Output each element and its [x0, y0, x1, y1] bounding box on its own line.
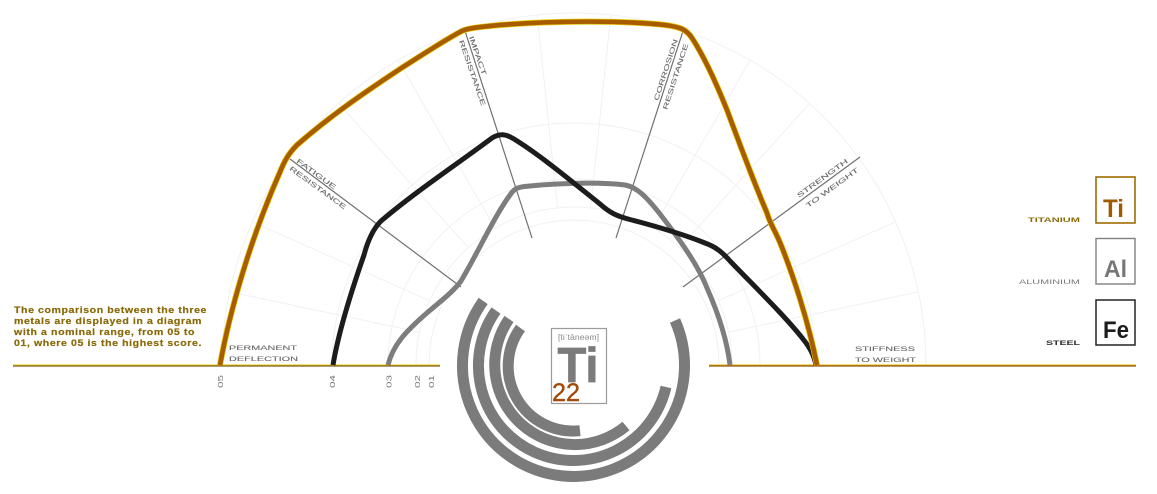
element card: titanium: [tiˈtāneəm]	[558, 333, 599, 342]
scale ticks: 05	[216, 375, 225, 388]
legend: titanium	[1028, 177, 1135, 224]
axis lines	[290, 31, 860, 287]
element card: titanium: Ti	[558, 339, 598, 393]
axis label: impact resistance	[457, 35, 487, 108]
axis label: stiffness to weight: STIFFNESS	[855, 346, 916, 353]
legend: steel: STEEL	[1046, 340, 1080, 347]
element card: titanium: 22	[552, 379, 580, 407]
concentric score rings	[463, 301, 685, 476]
scale ticks: 03	[384, 375, 394, 388]
steel curve	[333, 135, 816, 365]
axis label: fatigue resistance: RESISTANCE	[288, 165, 348, 212]
legend: titanium: TITANIUM	[1028, 217, 1080, 224]
axis label: permanent deflection	[229, 345, 298, 363]
axis label: strength to weight: STRENGTH	[796, 158, 850, 200]
legend: steel: Fe	[1103, 317, 1129, 344]
axis label: permanent deflection: DEFLECTION	[229, 356, 298, 363]
description text: metals are displayed in a diagram	[14, 316, 202, 326]
aluminium curve	[388, 183, 730, 365]
description text: 01, where 05 is the highest score.	[14, 338, 202, 348]
axis label: permanent deflection: PERMANENT	[229, 345, 297, 352]
axis label: impact resistance: IMPACT	[467, 35, 487, 76]
legend: titanium: Ti	[1103, 195, 1124, 223]
axis label: stiffness to weight: TO WEIGHT	[855, 357, 916, 364]
baseline right	[709, 364, 1136, 367]
legend: aluminium: ALUMINIUM	[1019, 279, 1080, 286]
scale ticks	[216, 375, 436, 388]
radar grid	[222, 13, 926, 365]
scale ticks: 01	[427, 375, 436, 388]
axis label: impact resistance: RESISTANCE	[457, 39, 487, 108]
scale ticks: 04	[328, 375, 337, 388]
description text: The comparison between the three	[14, 305, 207, 315]
scale ticks: 02	[413, 375, 422, 388]
axis label: stiffness to weight	[855, 346, 916, 364]
baseline left	[13, 364, 440, 367]
axis label: fatigue resistance	[288, 158, 348, 212]
description text	[13, 305, 207, 348]
element card: titanium	[552, 328, 606, 407]
legend: aluminium	[1019, 238, 1135, 286]
legend: steel	[1046, 300, 1135, 347]
axis label: corrosion resistance: RESISTANCE	[662, 42, 691, 111]
description text: with a nominal range, from 05 to	[13, 327, 195, 337]
legend: aluminium: Al	[1104, 256, 1127, 283]
axis label: strength to weight	[796, 158, 860, 210]
axis label: corrosion resistance: CORROSION	[653, 38, 680, 102]
axis label: strength to weight: TO WEIGHT	[805, 167, 860, 210]
axis label: fatigue resistance: FATIGUE	[295, 158, 338, 192]
titanium curve	[220, 22, 817, 365]
axis label: corrosion resistance	[653, 38, 691, 111]
